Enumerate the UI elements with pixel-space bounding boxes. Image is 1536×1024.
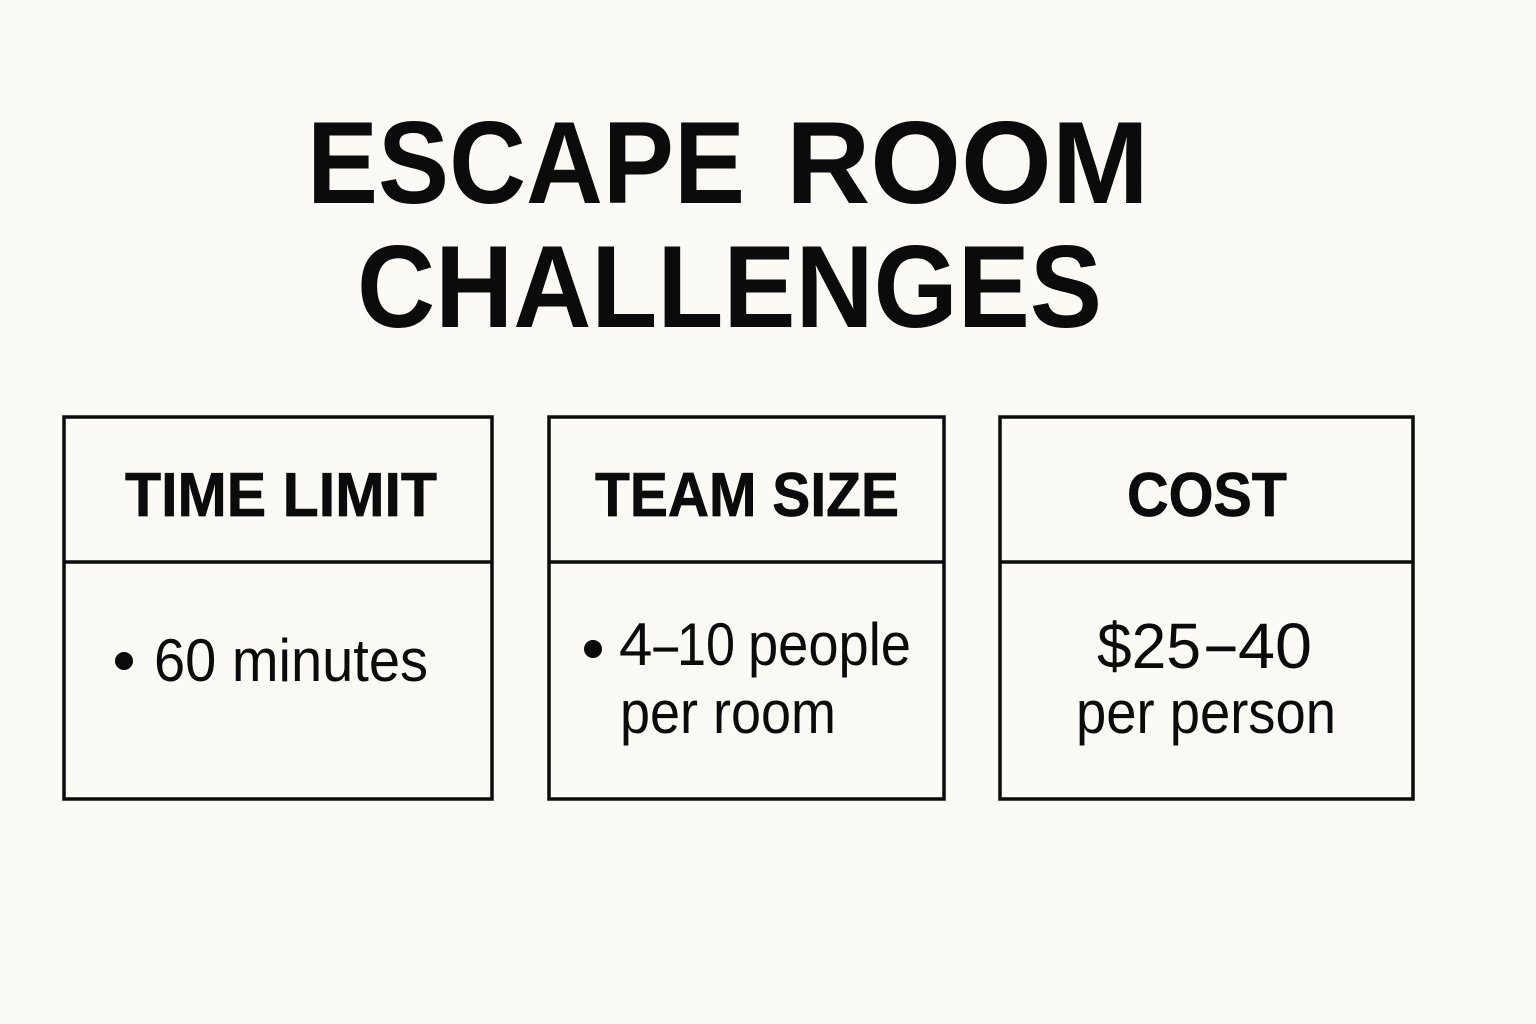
title: ESCAPE: [307, 97, 745, 228]
bullet: team size value: per room: [620, 679, 836, 746]
heading: time limit: TIME LIMIT: [125, 461, 437, 530]
cost value: $25: [1097, 610, 1201, 682]
bullet: 60 minutes: 60 minutes: [154, 627, 428, 694]
bullet: team size value: 10: [677, 611, 735, 678]
cost value: per person: [1076, 679, 1336, 746]
cost value: 40: [1238, 610, 1312, 682]
heading: team size: TEAM SIZE: [595, 461, 899, 530]
title: ROOM: [786, 97, 1149, 228]
panel: team size: [549, 417, 944, 799]
panel: cost: [1000, 417, 1413, 799]
heading: cost: COST: [1127, 461, 1287, 530]
cost value: [1076, 610, 1336, 746]
bullet: team size value: –: [654, 622, 678, 669]
title: [307, 97, 1149, 352]
title: CHALLENGES: [357, 221, 1102, 352]
bullet: team size value: people: [748, 611, 911, 678]
panel: time limit: [64, 417, 492, 799]
cost value: –: [1207, 616, 1235, 672]
bullet: team size value: [584, 611, 911, 746]
bullet: team size value: 4: [619, 611, 652, 678]
